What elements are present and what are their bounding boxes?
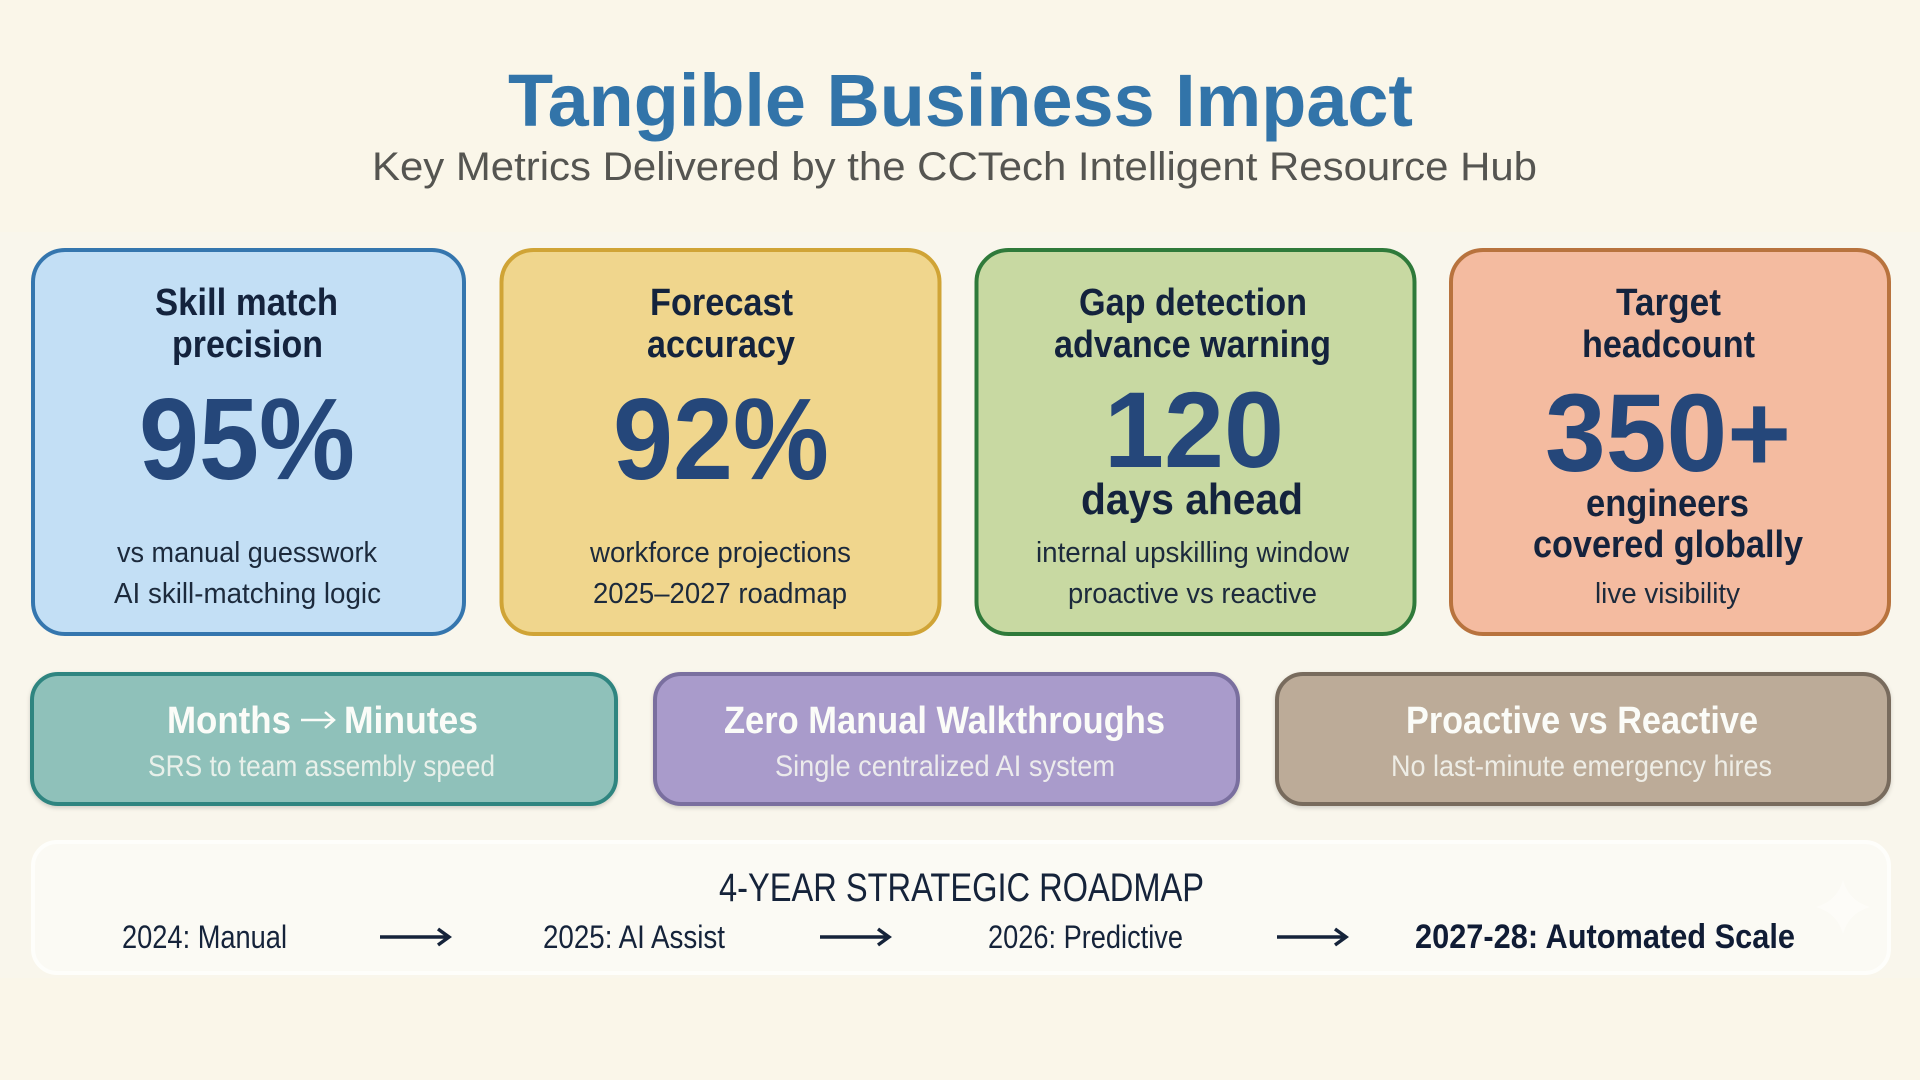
card detail: SRS to team assembly speed	[148, 750, 495, 783]
card detail	[114, 537, 381, 610]
card heading: advance warning	[1054, 324, 1331, 366]
panel: forecast accuracy	[502, 250, 940, 634]
arrow	[820, 929, 889, 945]
metric: 350+: 350+	[1545, 372, 1791, 495]
metric unit: days ahead	[1081, 475, 1303, 524]
sparkle	[1816, 880, 1870, 934]
panel: strategic roadmap	[33, 842, 1889, 973]
metric: 95%: 95%	[139, 374, 355, 504]
milestone: 2024: 2024: Manual	[122, 919, 287, 955]
card heading: headcount	[1582, 324, 1755, 366]
card detail: workforce projections	[589, 537, 851, 569]
card detail: live visibility	[1595, 578, 1740, 610]
header	[372, 59, 1537, 189]
arrow	[1277, 929, 1346, 945]
card detail: AI skill-matching logic	[114, 578, 381, 610]
milestone: 2025: 2025: AI Assist	[543, 919, 725, 955]
card heading: Zero Manual Walkthroughs	[724, 700, 1165, 742]
card detail: 2025–2027 roadmap	[593, 578, 847, 610]
card detail: vs manual guesswork	[117, 537, 377, 569]
card heading	[1582, 282, 1755, 366]
card heading	[155, 282, 338, 366]
subtitle: Key Metrics Delivered by the CCTech Intelligent Resource Hub	[372, 145, 1537, 189]
card heading	[1054, 282, 1331, 366]
card heading: Skill match	[155, 282, 338, 324]
card detail: Single centralized AI system	[775, 750, 1115, 783]
card detail: proactive vs reactive	[1068, 578, 1317, 610]
card detail: internal upskilling window	[1036, 537, 1350, 569]
panel: skill match precision	[33, 250, 464, 634]
card background	[33, 250, 464, 634]
panel: proactive vs reactive	[1277, 674, 1889, 804]
card heading: precision	[172, 324, 323, 366]
panel: target headcount	[1451, 250, 1889, 634]
metric unit: engineers	[1586, 483, 1749, 525]
card background	[1277, 674, 1889, 804]
card heading: accuracy	[647, 324, 795, 366]
milestone: 2027-28: 2027-28: Automated Scale	[1415, 918, 1795, 956]
card detail: No last-minute emergency hires	[1391, 750, 1772, 783]
metric unit	[1533, 483, 1803, 566]
card heading: Gap detection	[1079, 282, 1307, 324]
card heading: Target	[1616, 282, 1721, 324]
roadmap background	[33, 842, 1889, 973]
metric unit: covered globally	[1533, 524, 1803, 566]
title: Tangible Business Impact	[508, 59, 1413, 142]
panel: zero manual walkthroughs	[655, 674, 1238, 804]
metric: 120: 120	[1104, 369, 1284, 490]
card background	[976, 250, 1414, 634]
card heading: Months	[167, 700, 291, 742]
card heading: Forecast	[650, 282, 793, 324]
card background	[32, 674, 616, 804]
card background	[502, 250, 940, 634]
card heading: Proactive vs Reactive	[1406, 700, 1758, 742]
milestone: 2026: 2026: Predictive	[988, 919, 1183, 955]
roadmap heading: 4-YEAR STRATEGIC ROADMAP	[719, 866, 1204, 910]
arrow	[380, 929, 449, 945]
card background	[655, 674, 1238, 804]
metric: 92%: 92%	[613, 374, 829, 504]
panel: months to minutes	[32, 674, 616, 804]
panel: gap detection advance warning	[976, 250, 1414, 634]
card heading	[647, 282, 795, 366]
arrow	[301, 712, 334, 728]
card background	[1451, 250, 1889, 634]
card detail	[1036, 537, 1350, 610]
card heading continued: Minutes	[344, 700, 478, 742]
card detail	[589, 537, 851, 610]
background band	[0, 232, 1920, 978]
